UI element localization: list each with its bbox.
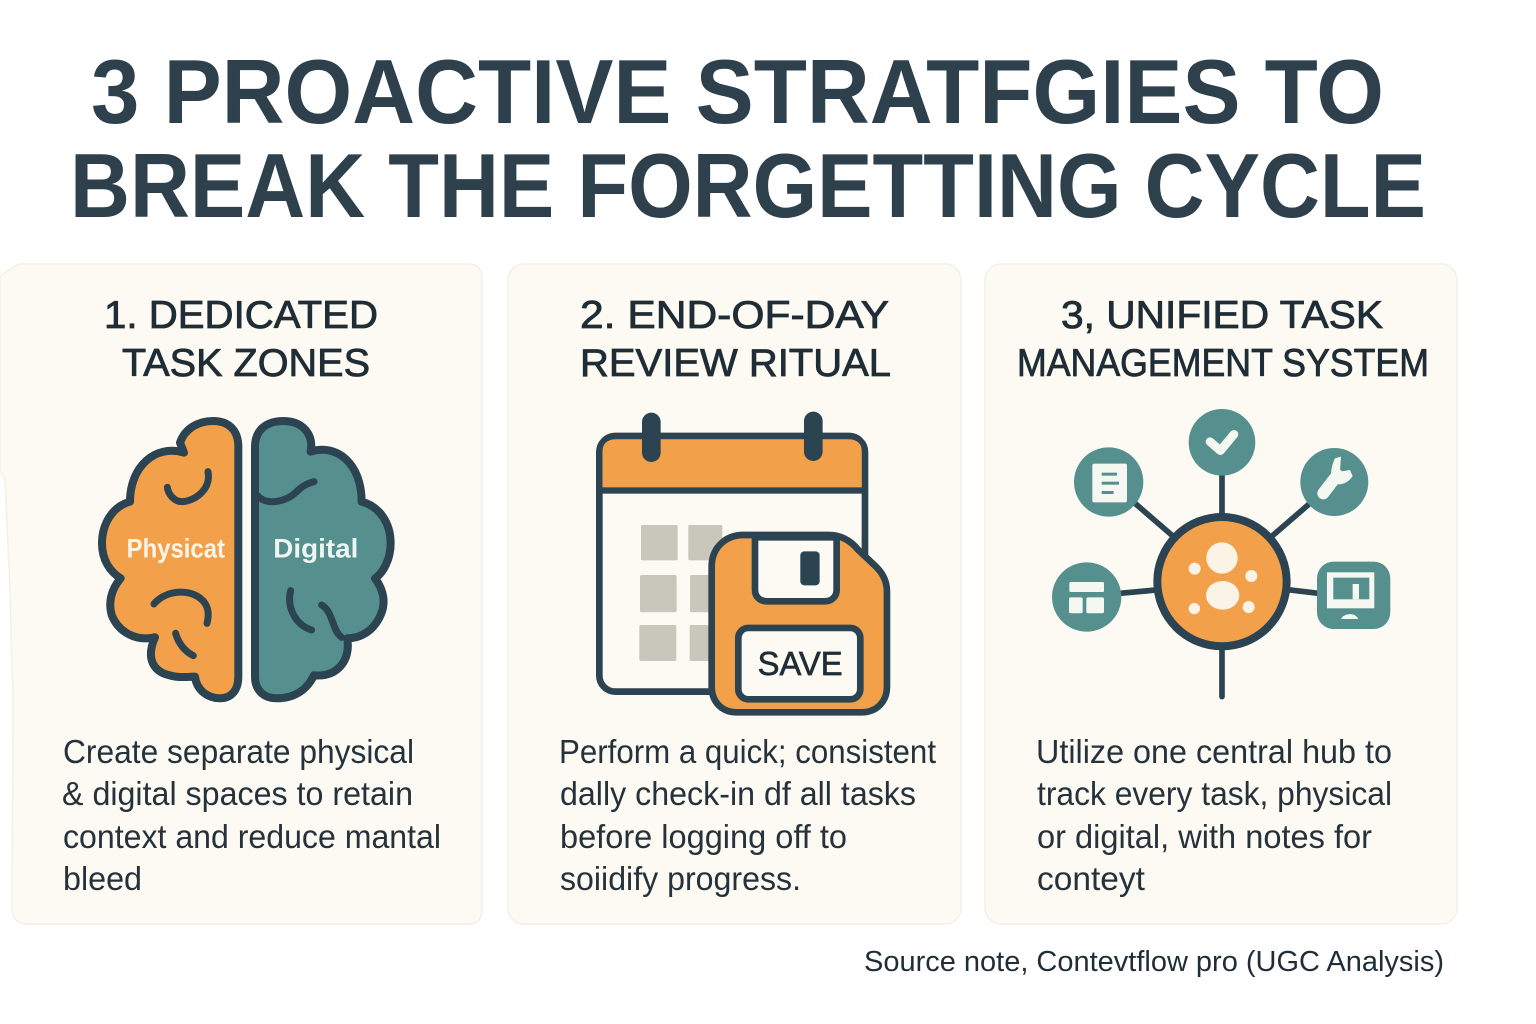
body text 3: conteyt xyxy=(1037,860,1145,897)
node: check xyxy=(1189,409,1255,476)
body text 1: Create separate physical xyxy=(63,733,414,770)
heading 2: REVIEW RITUAL xyxy=(580,342,891,385)
node: monitor xyxy=(1317,562,1390,629)
body text 1: bleed xyxy=(63,860,142,897)
body text 2: before logging off to xyxy=(560,818,847,855)
body text 3: or digital, with notes for xyxy=(1037,818,1372,855)
title xyxy=(70,42,1426,237)
body text 3: Utilize one central hub to xyxy=(1036,733,1392,770)
heading 3: 3, UNIFIED TASK xyxy=(1061,294,1383,337)
source note: Source note, Contevtflow pro (UGC Analysis) xyxy=(864,946,1444,978)
body text 2: dally check-in df all tasks xyxy=(560,775,916,812)
body text 1 xyxy=(62,733,441,897)
title: BREAK THE FORGETTING CYCLE xyxy=(70,136,1426,237)
heading 1: 1. DEDICATED xyxy=(104,294,378,337)
card background 3 xyxy=(985,264,1457,924)
body text 2: Perform a quick; consistent xyxy=(559,733,936,770)
label: physical: Physicat xyxy=(127,533,225,563)
label: digital: Digital xyxy=(273,533,358,563)
heading 2: 2. END-OF-DAY xyxy=(580,294,889,337)
icon: central hub diagram xyxy=(1052,409,1390,697)
hub xyxy=(1157,517,1287,646)
title: 3 PROACTIVE STRATFGIES TO xyxy=(91,42,1384,143)
card background 2 xyxy=(508,264,961,924)
body text 1: context and reduce mantal xyxy=(63,818,441,855)
heading 3 xyxy=(1017,294,1429,385)
body text 2 xyxy=(559,733,936,897)
body text 3 xyxy=(1036,733,1392,897)
panel: unified task management system xyxy=(985,264,1457,924)
card background 1 xyxy=(0,264,482,924)
icon: brain split physical and digital xyxy=(102,421,391,698)
body text 1: & digital spaces to retain xyxy=(62,775,413,812)
connectors xyxy=(1120,473,1318,697)
body text 2: soiidify progress. xyxy=(560,860,801,897)
node: wrench xyxy=(1300,448,1368,516)
node: layout xyxy=(1052,562,1121,632)
panel: dedicated task zones xyxy=(0,264,482,924)
icon: calendar with save disk xyxy=(599,412,887,712)
heading 1 xyxy=(104,294,378,385)
save disk: SAVE xyxy=(758,646,843,683)
body text 3: track every task, physical xyxy=(1037,775,1392,812)
node: document xyxy=(1074,447,1143,517)
save disk xyxy=(712,535,887,712)
panel: end-of-day review ritual xyxy=(508,264,961,924)
heading 2 xyxy=(580,294,891,385)
heading 3: MANAGEMENT SYSTEM xyxy=(1017,342,1429,385)
calendar xyxy=(599,412,865,692)
heading 1: TASK ZONES xyxy=(122,342,370,385)
